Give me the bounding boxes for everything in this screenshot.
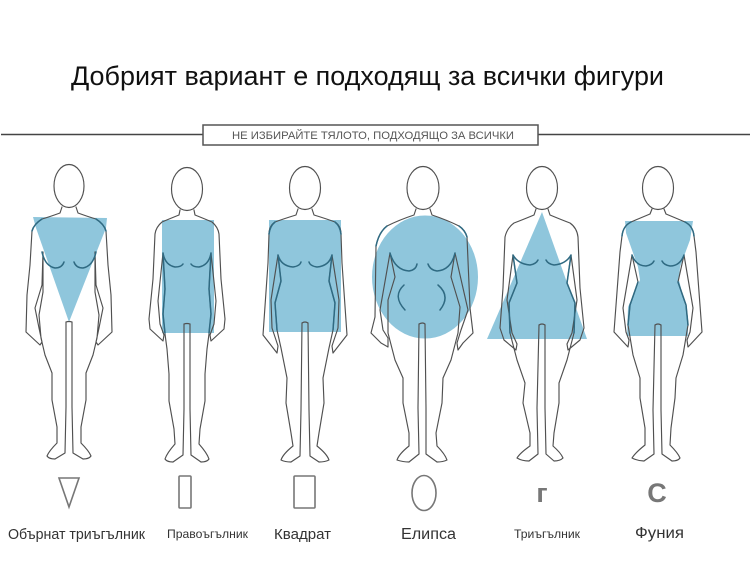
figure: triangle (487, 166, 587, 461)
icon: inverted triangle (59, 478, 79, 507)
icon: rectangle (179, 476, 191, 508)
figure: ellipse (371, 166, 478, 462)
figure: inverted triangle (26, 164, 112, 459)
label: ellipse: Елипса (401, 526, 456, 543)
title: Добрият вариант е подходящ за всички фигури (71, 61, 664, 91)
blue shape: square (269, 220, 341, 332)
figure: square (263, 166, 347, 462)
label: square: Квадрат (274, 526, 331, 543)
body outline (500, 166, 584, 461)
figure: funnel (614, 166, 702, 461)
blue shape: rectangle (162, 220, 214, 333)
figure: rectangle (149, 168, 225, 462)
header banner (1, 125, 750, 145)
blue shape: inverted triangle (33, 217, 107, 322)
icon: letter g: г (536, 478, 548, 508)
label: funnel: Фуния (635, 525, 684, 542)
body outline (371, 166, 473, 462)
body outline (614, 166, 702, 461)
label: inverted triangle: Обърнат триъгълник (8, 527, 146, 543)
body outline (26, 164, 112, 459)
blue shape: ellipse (372, 216, 478, 338)
icon: square (294, 476, 315, 508)
label: rectangle: Правоъгълник (167, 527, 249, 541)
blue shape: funnel (625, 221, 693, 336)
header banner: НЕ ИЗБИРАЙТЕ ТЯЛОТО, ПОДХОДЯЩО ЗА ВСИЧКИ (232, 129, 514, 142)
body outline (149, 168, 225, 462)
label: triangle: Триъгълник (514, 527, 581, 541)
body outline (263, 166, 347, 462)
icon: ellipse (412, 476, 436, 510)
icon: letter s: С (647, 478, 667, 508)
blue shape: triangle (487, 212, 587, 339)
